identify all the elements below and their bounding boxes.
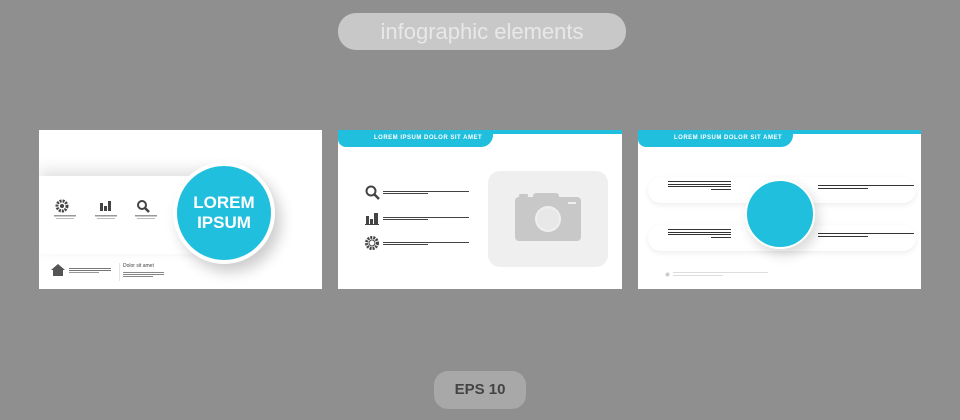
panel: center circle — [638, 130, 921, 289]
icon: gear — [54, 200, 76, 219]
panel: camera — [338, 130, 622, 289]
text: bottom right — [818, 233, 914, 237]
header tab: LOREM IPSUM DOLOR SIT AMET — [674, 135, 782, 141]
text lines — [69, 268, 111, 273]
footnote — [666, 272, 768, 276]
list item: search — [366, 186, 469, 200]
badge: eps 10 — [434, 371, 526, 409]
badge: eps 10: EPS 10 — [455, 381, 505, 398]
header tab — [338, 130, 493, 147]
header tab: LOREM IPSUM DOLOR SIT AMET — [374, 135, 482, 141]
title pill: infographic elements — [380, 19, 584, 44]
circle: lorem ipsum: LOREM — [193, 193, 255, 212]
text: top right — [818, 185, 914, 189]
row bands — [648, 177, 916, 203]
text: dolor sit amet: Dolor sit amet — [123, 263, 154, 269]
list item: gear — [365, 236, 469, 250]
title pill — [338, 13, 626, 50]
band — [39, 176, 219, 254]
text: dolor sit amet — [119, 263, 164, 281]
circle: lorem ipsum — [173, 162, 275, 264]
header tab — [638, 130, 793, 147]
icon: magnifier — [135, 200, 157, 219]
text: bottom left — [668, 229, 731, 238]
list item: chart — [365, 213, 469, 225]
text: top left — [668, 181, 731, 190]
panel: lorem ipsum — [39, 130, 322, 289]
image placeholder: camera — [488, 171, 608, 267]
circle — [745, 179, 815, 249]
icon: house — [51, 264, 65, 276]
icon: bar chart — [95, 201, 117, 219]
circle: lorem ipsum: IPSUM — [197, 213, 251, 232]
